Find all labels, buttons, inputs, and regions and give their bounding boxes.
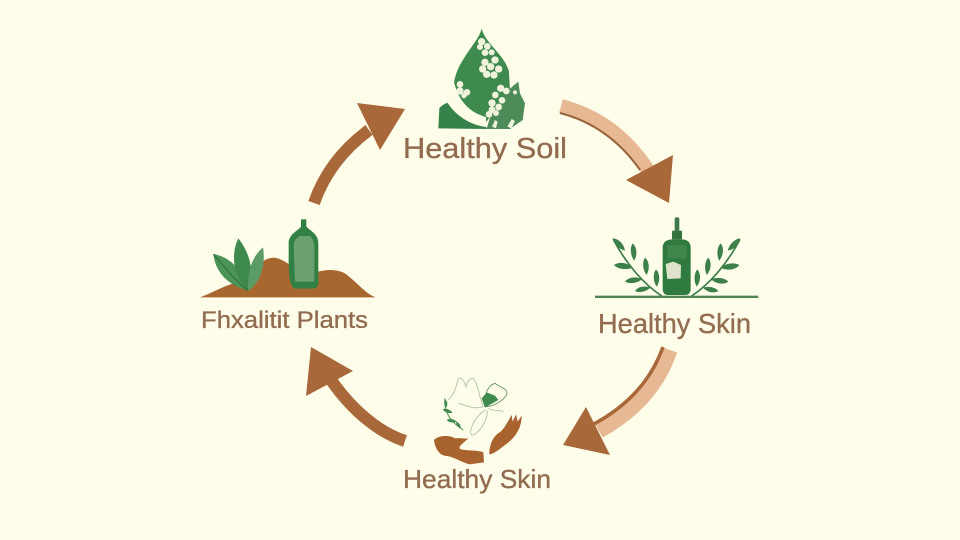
arrow: hands to plants xyxy=(306,347,405,441)
heading: Healthy Skin bottom: Healthy Skin xyxy=(403,464,551,494)
arrow: skin to hands xyxy=(563,347,670,455)
heading: Healthy Skin right: Healthy Skin xyxy=(598,308,751,339)
heading: Healthy Soil: Healthy Soil xyxy=(403,133,567,165)
heading: garbled Plants label: Fhxalitit Plants xyxy=(201,307,368,334)
arrow: soil to skin xyxy=(560,106,673,203)
arrow: plants to soil xyxy=(314,103,405,203)
icon: bottle with branches xyxy=(595,217,758,298)
icon: soil mound with plant and bottle xyxy=(200,219,376,297)
icon: water drop with flowers xyxy=(438,28,525,129)
icon: hands holding flower xyxy=(434,378,522,464)
